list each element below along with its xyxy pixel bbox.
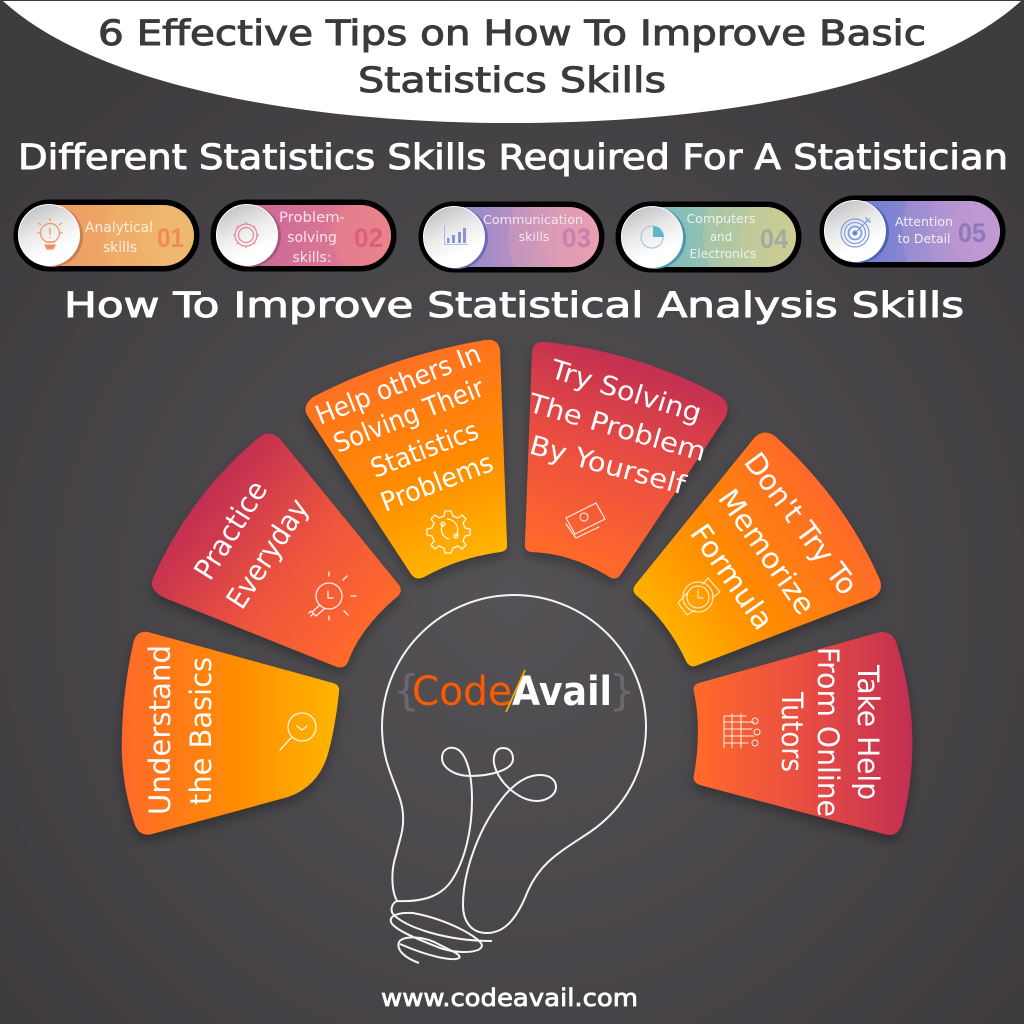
panel: don't try to memorize: Don't Try To (737, 446, 865, 601)
skill pill 03: 03 (562, 223, 591, 253)
skill pill 05: Attention (895, 214, 953, 229)
panel: take help: Take Help (851, 664, 885, 800)
skill pill 05 (820, 196, 1006, 268)
panel: practice everyday: Everyday (219, 492, 315, 615)
icon: pie chart (641, 226, 664, 248)
skill pill 01 (14, 200, 200, 272)
panel: help others: Solving Their (329, 372, 489, 460)
skill pill 02: skills: (292, 250, 332, 266)
icon: banknotes (566, 503, 605, 538)
icon: target (841, 217, 871, 247)
panel: don't try to memorize: Memorize (711, 483, 822, 621)
light bulb outline (382, 595, 646, 963)
skill pill 01: skills (103, 240, 137, 256)
skill pill 03: skills (519, 229, 549, 244)
skill pill 04: and (710, 230, 732, 244)
skill pill 04 (616, 202, 802, 272)
panel: help others: Problems (376, 447, 498, 519)
skill pill 02: 02 (354, 223, 383, 253)
website url: www.codeavail.com (381, 984, 638, 1012)
skill pill 02 (210, 200, 396, 272)
panel: try solving: Try Solving (546, 354, 705, 429)
panel: understand the basics: Understand (143, 645, 177, 815)
skill pill 02: solving (287, 230, 337, 246)
logo: CodeAvail: } (609, 666, 636, 715)
heading: skills: Different Statistics Skills Required For A Statistician (18, 138, 1008, 178)
panel: practice everyday: Practice (187, 474, 274, 586)
icon: light bulb (309, 572, 356, 620)
heading: improve: How To Improve Statistical Analysis Skills (64, 286, 964, 326)
panel: understand the basics: the Basics (184, 657, 218, 805)
icon: gear (233, 222, 259, 248)
skill pill 05: to Detail (898, 231, 950, 246)
panel: try solving (524, 342, 728, 579)
skill pill 05: 05 (958, 218, 986, 248)
skill pill 04: 04 (760, 224, 788, 254)
icon: wristwatch (678, 578, 720, 615)
panel: help others: Statistics (366, 415, 483, 485)
skill pill 03 (418, 202, 604, 272)
panel: try solving: By Yourself (526, 430, 689, 501)
panel: help others (305, 339, 507, 578)
title banner (3, 1, 1021, 123)
panel: don't try to memorize (634, 432, 881, 666)
panel: take help (694, 632, 912, 835)
title banner: 6 Effective Tips on How To Improve Basic (98, 14, 926, 54)
skill pill 02: Problem- (279, 210, 345, 226)
icon: tutors group (724, 714, 760, 748)
panel: help others: Help others In (311, 339, 485, 432)
panel: practice everyday (152, 433, 401, 667)
skill pill 01: Analytical (85, 220, 153, 236)
panel: don't try to memorize: Formula (683, 518, 781, 636)
icon: gear (427, 511, 470, 553)
icon: magnifier (280, 713, 316, 750)
logo: CodeAvail: Avail (512, 669, 612, 715)
panel: understand the basics (122, 632, 339, 835)
skill pill 04: Computers (686, 212, 756, 226)
skill pill 04: Electronics (690, 247, 756, 261)
skill pill 03: Communication (483, 212, 583, 227)
panel: take help: From Online (811, 647, 845, 817)
panel: take help: Tutors (775, 691, 809, 772)
title banner: Statistics Skills (358, 61, 666, 101)
logo: CodeAvail: Code (412, 669, 512, 715)
icon: bar chart (444, 226, 468, 245)
icon: idea bulb (37, 218, 63, 249)
panel: try solving: The Problem (524, 388, 710, 468)
logo: CodeAvail (393, 666, 636, 715)
skill pill 01: 01 (157, 223, 184, 253)
logo: CodeAvail: { (393, 666, 420, 715)
